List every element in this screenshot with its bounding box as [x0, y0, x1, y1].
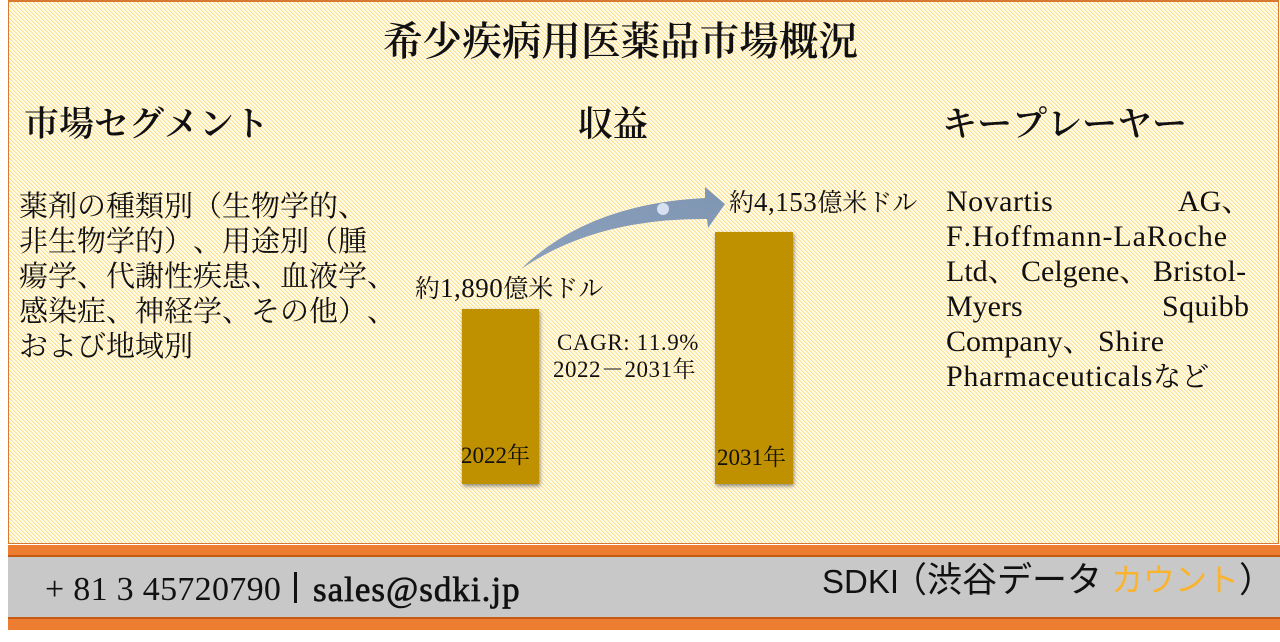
CAGR label	[553, 330, 699, 382]
contact details: sales@sdki.jp	[313, 570, 521, 609]
company name: 渋谷データ	[927, 561, 1102, 600]
text block: key players: Ltd、	[946, 255, 1018, 288]
text block: segments: 瘍学、代謝性疾患、血液学、	[19, 261, 396, 293]
text block: segments: 非生物学的）、用途別（腫	[19, 226, 367, 258]
footer band	[8, 545, 1280, 630]
bar: 2031	[715, 232, 793, 484]
text block: segments: 感染症、神経学、その他）、	[19, 296, 396, 328]
text block: segments: および地域別	[19, 331, 193, 363]
bar label: 2031: 2031年	[717, 445, 786, 470]
heading: key players: キープレーヤー	[942, 105, 1187, 144]
company name: （	[892, 561, 927, 600]
text block: segments: 薬剤の種類別（生物学的、	[19, 191, 367, 223]
arrow: growth	[521, 187, 725, 269]
text block: key players	[946, 185, 1251, 393]
heading: revenue: 収益	[578, 105, 648, 144]
footer grey strip	[8, 555, 1280, 619]
bar: 2022	[462, 309, 539, 484]
CAGR label: CAGR: 11.9%	[557, 330, 699, 355]
company name: カウント	[1111, 562, 1239, 598]
heading: market segments: 市場セグメント	[24, 105, 269, 144]
CAGR label: 2022－2031年	[553, 357, 696, 382]
value label: 2031: 約4,153億米ドル	[729, 187, 917, 217]
text block: segments	[19, 191, 396, 363]
text block: key players: Squibb	[1162, 290, 1249, 323]
value label: 2022: 約1,890億米ドル	[415, 273, 603, 303]
text block: key players: F.Hoffmann-LaRoche	[946, 220, 1228, 253]
text block: key players: Celgene、	[1021, 255, 1149, 288]
text block: key players: Shire	[1098, 325, 1165, 358]
bar label: 2022: 2022年	[461, 443, 530, 468]
text block: key players: Myers	[946, 290, 1023, 323]
company name	[822, 561, 1274, 600]
contact details: + 81 3 45720790	[45, 571, 281, 608]
text block: key players: Bristol-	[1153, 255, 1246, 288]
text block: key players: Company、	[946, 325, 1093, 358]
contact details	[45, 570, 521, 609]
text block: key players: AG、	[1178, 185, 1251, 218]
title: 希少疾病用医薬品市場概況	[383, 20, 858, 64]
text block: key players: Pharmaceuticalsなど	[946, 360, 1209, 393]
text: ）	[1239, 561, 1274, 600]
text block: key players: Novartis	[946, 185, 1053, 218]
company name: SDKI	[822, 563, 899, 600]
